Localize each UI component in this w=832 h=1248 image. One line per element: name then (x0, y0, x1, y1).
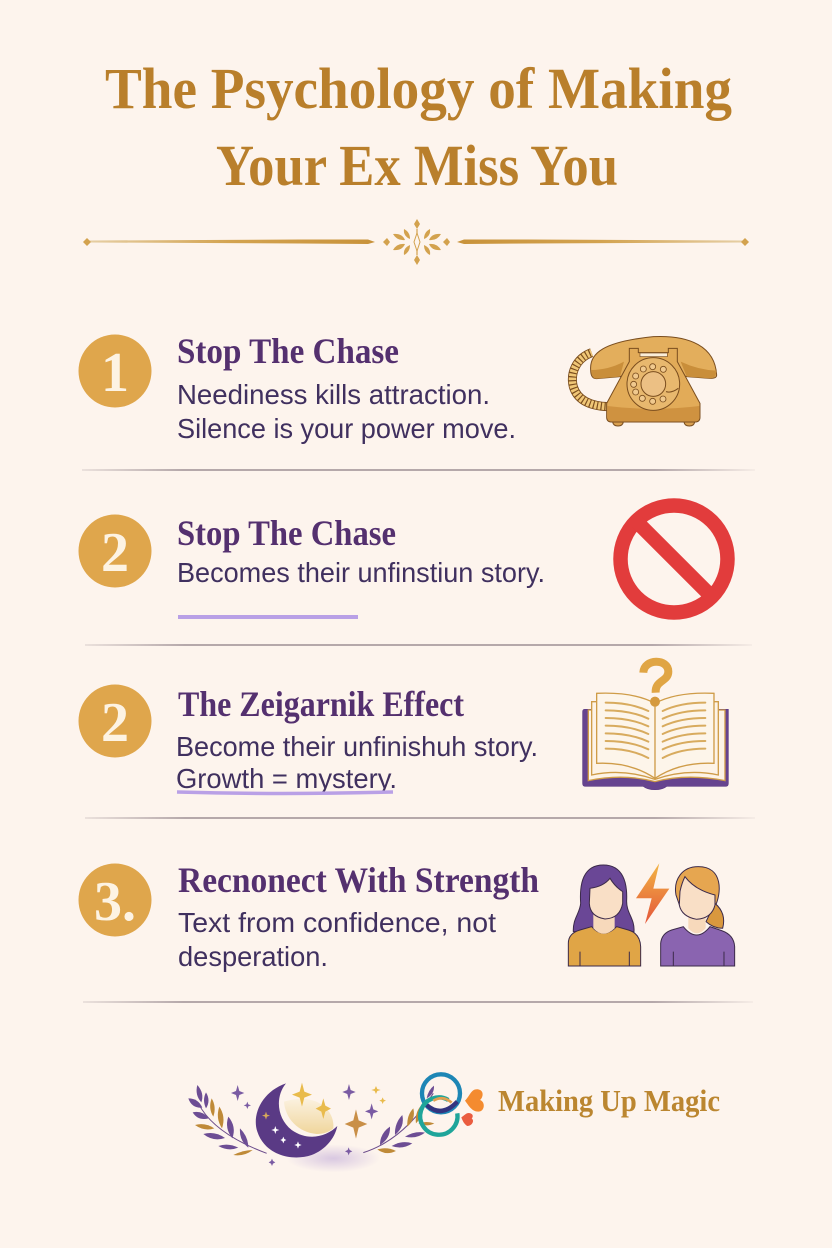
step 4 text: desperation. (178, 941, 328, 972)
moon glow (284, 1099, 333, 1134)
woman with orange ponytail (661, 867, 735, 966)
step 4 heading: Recnonect With Strength (178, 860, 539, 900)
number badge 3: 3. (94, 871, 136, 933)
icon: two people with lightning bolt (568, 863, 735, 966)
number badge 2: 2 (101, 522, 129, 584)
number badge 3 (78, 864, 152, 936)
divider line (85, 644, 752, 646)
title: The Psychology of Making (105, 56, 732, 121)
step 3 text: Become their unfinishuh story. (176, 731, 538, 762)
accent underline (178, 615, 358, 619)
step 2: stop the chase (78, 506, 728, 619)
title: Your Ex Miss You (216, 133, 618, 198)
icon: lightning bolt (636, 863, 669, 924)
stars (292, 1083, 386, 1119)
ornamental divider (83, 219, 749, 265)
step 1 text: Silence is your power move. (177, 413, 516, 444)
number badge 1 (78, 334, 152, 408)
number badge 2 (78, 514, 152, 588)
icon: rotary telephone (572, 337, 717, 426)
left laurel (188, 1085, 267, 1155)
title (105, 56, 732, 198)
step 2 heading: Stop The Chase (177, 513, 396, 553)
accent underline (177, 792, 393, 794)
step 1 text: Neediness kills attraction. (177, 379, 490, 410)
number badge 2 repeated (78, 684, 152, 758)
divider line (85, 817, 755, 819)
right laurel (363, 1086, 434, 1153)
logo: interlinked rings and hearts (420, 1074, 484, 1135)
step 4 text (178, 907, 496, 972)
step 3 text: Growth = mystery. (176, 763, 397, 794)
step 1 heading: Stop The Chase (177, 331, 399, 371)
watercolor wash (287, 1144, 380, 1172)
icon: open book with question mark (583, 662, 728, 790)
brand name: Making Up Magic (498, 1083, 720, 1118)
step 3: zeigarnik effect (78, 662, 728, 794)
footer illustration: moon, stars and laurels (188, 1083, 434, 1172)
icon: prohibition sign (620, 506, 728, 612)
step 1 text (177, 379, 516, 444)
step 3 heading: The Zeigarnik Effect (178, 684, 464, 724)
number badge 1: 1 (101, 342, 129, 404)
divider line (82, 469, 755, 471)
step 3 text (176, 731, 538, 794)
step 4 text: Text from confidence, not (178, 907, 496, 938)
number badge 2 repeated: 2 (101, 692, 129, 754)
step 1: stop the chase (78, 331, 717, 444)
divider line (83, 1001, 753, 1003)
woman with long purple hair (568, 865, 641, 966)
crescent moon (256, 1083, 337, 1157)
step 4: reconnect with strength (78, 860, 735, 972)
step 2 text: Becomes their unfinstiun story. (177, 557, 545, 588)
